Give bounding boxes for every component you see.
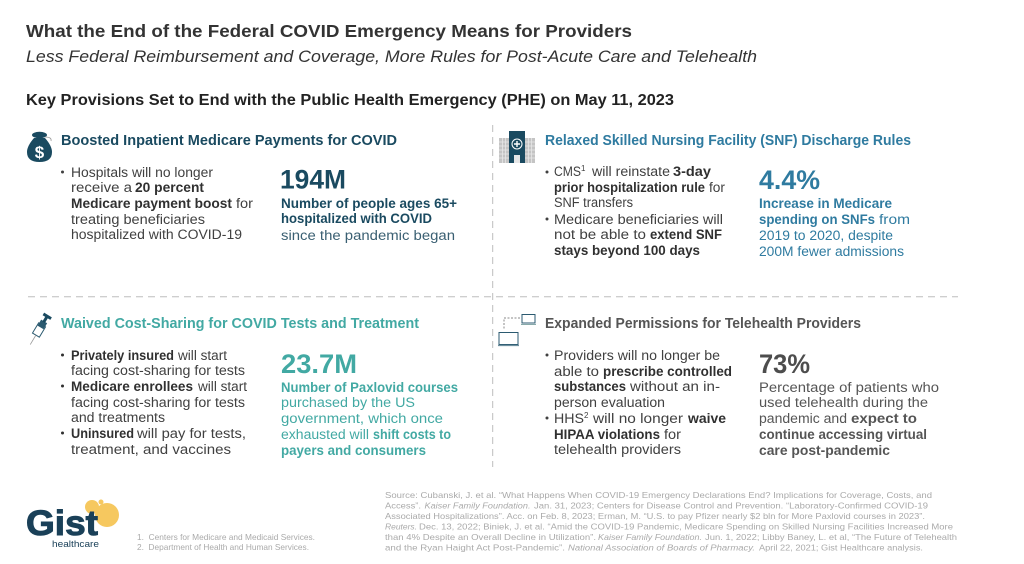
panel: expanded telehealth permissions	[498, 314, 939, 458]
stat: 73%: 73%	[759, 349, 810, 379]
bullets: Privately insured	[71, 348, 174, 363]
bullets: without an in-	[629, 379, 720, 394]
bullets: will reinstate	[591, 164, 670, 179]
heading: Relaxed Skilled Nursing Facility (SNF) Discharge Rules	[545, 133, 911, 149]
heading: Expanded Permissions for Telehealth Providers	[545, 316, 861, 332]
bullets: not be able to	[554, 227, 646, 242]
bullets: Medicare payment boost	[71, 196, 233, 211]
bullets: extend SNF	[650, 227, 722, 242]
stat: 73%	[759, 349, 939, 458]
source citation: Reuters.	[385, 522, 417, 532]
icon: syringe	[26, 313, 52, 347]
stat: 23.7M: payers and consumers	[281, 443, 426, 458]
bullets: prescribe controlled	[603, 364, 732, 379]
stat: 194M: 194M	[280, 164, 346, 194]
bullets	[61, 348, 247, 457]
bullets: receive a	[71, 180, 133, 195]
bullets: will pay for tests,	[136, 426, 246, 441]
stat: 73%: Percentage of patients who	[759, 380, 939, 395]
stat: 194M: Number of people ages 65+	[281, 196, 457, 211]
bullets: treatment, and vaccines	[71, 442, 231, 457]
source citation: Access”.	[385, 500, 421, 510]
source citation: Jun. 1, 2022; Libby Baney, L. et al, “The Future of Telehealth	[705, 532, 957, 542]
bullets: Medicare enrollees	[71, 379, 193, 394]
logo: Gist healthcare: Gist	[26, 504, 98, 543]
bullets: will no longer	[592, 411, 684, 426]
bullets	[546, 164, 726, 258]
panel: relaxed SNF discharge rules	[499, 131, 911, 259]
stat: 73%: used telehealth during the	[759, 395, 928, 410]
stat: 23.7M: 23.7M	[281, 349, 357, 379]
heading: Boosted Inpatient Medicare Payments for COVID	[61, 133, 397, 149]
bullets: able to	[554, 364, 599, 379]
stat: 23.7M: government, which once	[281, 411, 443, 426]
stat: 4.4%: 2019 to 2020, despite	[759, 228, 893, 243]
source citation: Dec. 13, 2022; Biniek, J. et al. “Amid the COVID-19 Pandemic, Medicare Spending on Skilled Nursing Facilities Increased More	[419, 522, 953, 532]
stat: 73%: expect to	[851, 411, 917, 426]
stat: 194M: hospitalized with COVID	[281, 211, 432, 226]
stat: 73%: continue accessing virtual	[759, 427, 927, 442]
heading: Waived Cost-Sharing for COVID Tests and Treatment	[61, 316, 419, 332]
stat: 23.7M	[281, 349, 458, 458]
bullets: HIPAA violations	[554, 427, 660, 442]
bullets: hospitalized with COVID-19	[71, 227, 242, 242]
bullets: will start	[197, 379, 247, 394]
bullets: Providers will no longer be	[554, 348, 720, 363]
bullets: 3-day	[673, 164, 712, 179]
bullets: will start	[177, 348, 227, 363]
section heading: Key Provisions Set to End with the Public Health Emergency (PHE) on May 11, 2023	[26, 92, 674, 109]
bullets: facing cost-sharing for tests	[71, 363, 245, 378]
source citation: April 22, 2021; Gist Healthcare analysis.	[759, 542, 923, 552]
bullets: facing cost-sharing for tests	[71, 395, 245, 410]
bullets: Uninsured	[71, 426, 134, 441]
stat: 4.4%: 200M fewer admissions	[759, 244, 904, 259]
stat: 4.4%: Increase in Medicare	[759, 196, 892, 211]
stat: 23.7M: Number of Paxlovid courses	[281, 380, 458, 395]
source citation: Source: Cubanski, J. et al. “What Happens When COVID-19 Emergency Declarations End? Implications for Coverage, Costs, and	[385, 490, 932, 500]
stat: 73%: pandemic and	[759, 411, 847, 426]
stat: 4.4%: from	[879, 212, 910, 227]
bullets: 1	[581, 164, 586, 173]
source citation: Kaiser Family Foundation.	[598, 532, 702, 542]
source citation	[385, 490, 957, 552]
bullets: 20 percent	[135, 180, 205, 195]
bullets	[61, 165, 254, 242]
icon: money bag	[27, 132, 52, 162]
panel: waived cost-sharing	[26, 313, 458, 458]
logo: Gist healthcare	[26, 500, 119, 550]
bullets: telehealth providers	[554, 442, 681, 457]
bullets: for	[709, 180, 726, 195]
bullets: Hospitals will no longer	[71, 165, 214, 180]
source citation: Kaiser Family Foundation.	[424, 500, 530, 510]
bullets: waive	[687, 411, 727, 426]
bullets: HHS	[554, 411, 584, 426]
source citation: Associated Hospitalizations”. Acc. on Feb. 8, 2023; Erman, M. “U.S. to pay Pfizer nearly $2 bln for More Paxlovid courses in 2023”.	[385, 511, 925, 521]
source citation: and the Ryan Haight Act Post-Pandemic”.	[385, 542, 565, 552]
bullets: for	[664, 427, 682, 442]
stat: 194M	[280, 164, 457, 243]
stat: 23.7M: purchased by the US	[281, 395, 415, 410]
panel: boosted inpatient payments	[27, 132, 457, 243]
logo: Gist healthcare: healthcare	[52, 539, 99, 550]
bullets: and treatments	[71, 410, 165, 425]
stat: 194M: since the pandemic began	[281, 228, 455, 243]
source citation: Jan. 31, 2023; Centers for Disease Control and Prevention. “Laboratory-Confirmed COVID-19	[534, 500, 928, 510]
bullets	[546, 348, 732, 457]
stat: 4.4%: spending on SNFs	[759, 212, 875, 227]
stat: 23.7M: shift costs to	[373, 427, 451, 442]
bullets: substances	[554, 379, 626, 394]
bullets: for	[236, 196, 254, 211]
bullets: treating beneficiaries	[71, 212, 205, 227]
footnotes: 2. Department of Health and Human Services.	[137, 542, 309, 552]
bullets: stays beyond 100 days	[554, 243, 700, 258]
title: What the End of the Federal COVID Emergency Means for Providers	[26, 21, 632, 41]
bullets: SNF transfers	[554, 195, 633, 210]
stat: 73%: care post-pandemic	[759, 443, 890, 458]
bullets: prior hospitalization rule	[554, 180, 705, 195]
bullets: Medicare beneficiaries will	[554, 212, 723, 227]
stat: 23.7M: exhausted will	[281, 427, 369, 442]
footnotes: 1. Centers for Medicare and Medicaid Services.	[137, 532, 315, 542]
source citation: than 4% Despite an Overall Decline in Utilization”.	[385, 532, 596, 542]
icon: connected devices	[498, 314, 536, 346]
subtitle: Less Federal Reimbursement and Coverage, More Rules for Post-Acute Care and Telehealth	[26, 47, 757, 66]
source citation: National Association of Boards of Pharmacy.	[568, 542, 755, 552]
bullets: person evaluation	[554, 395, 665, 410]
stat: 4.4%	[759, 165, 910, 259]
bullets: CMS	[554, 164, 581, 179]
icon: hospital building	[499, 131, 535, 163]
footnotes	[137, 532, 315, 552]
stat: 4.4%: 4.4%	[759, 165, 820, 195]
bullets: 2	[584, 411, 589, 420]
icon: money bag: $	[35, 143, 45, 162]
